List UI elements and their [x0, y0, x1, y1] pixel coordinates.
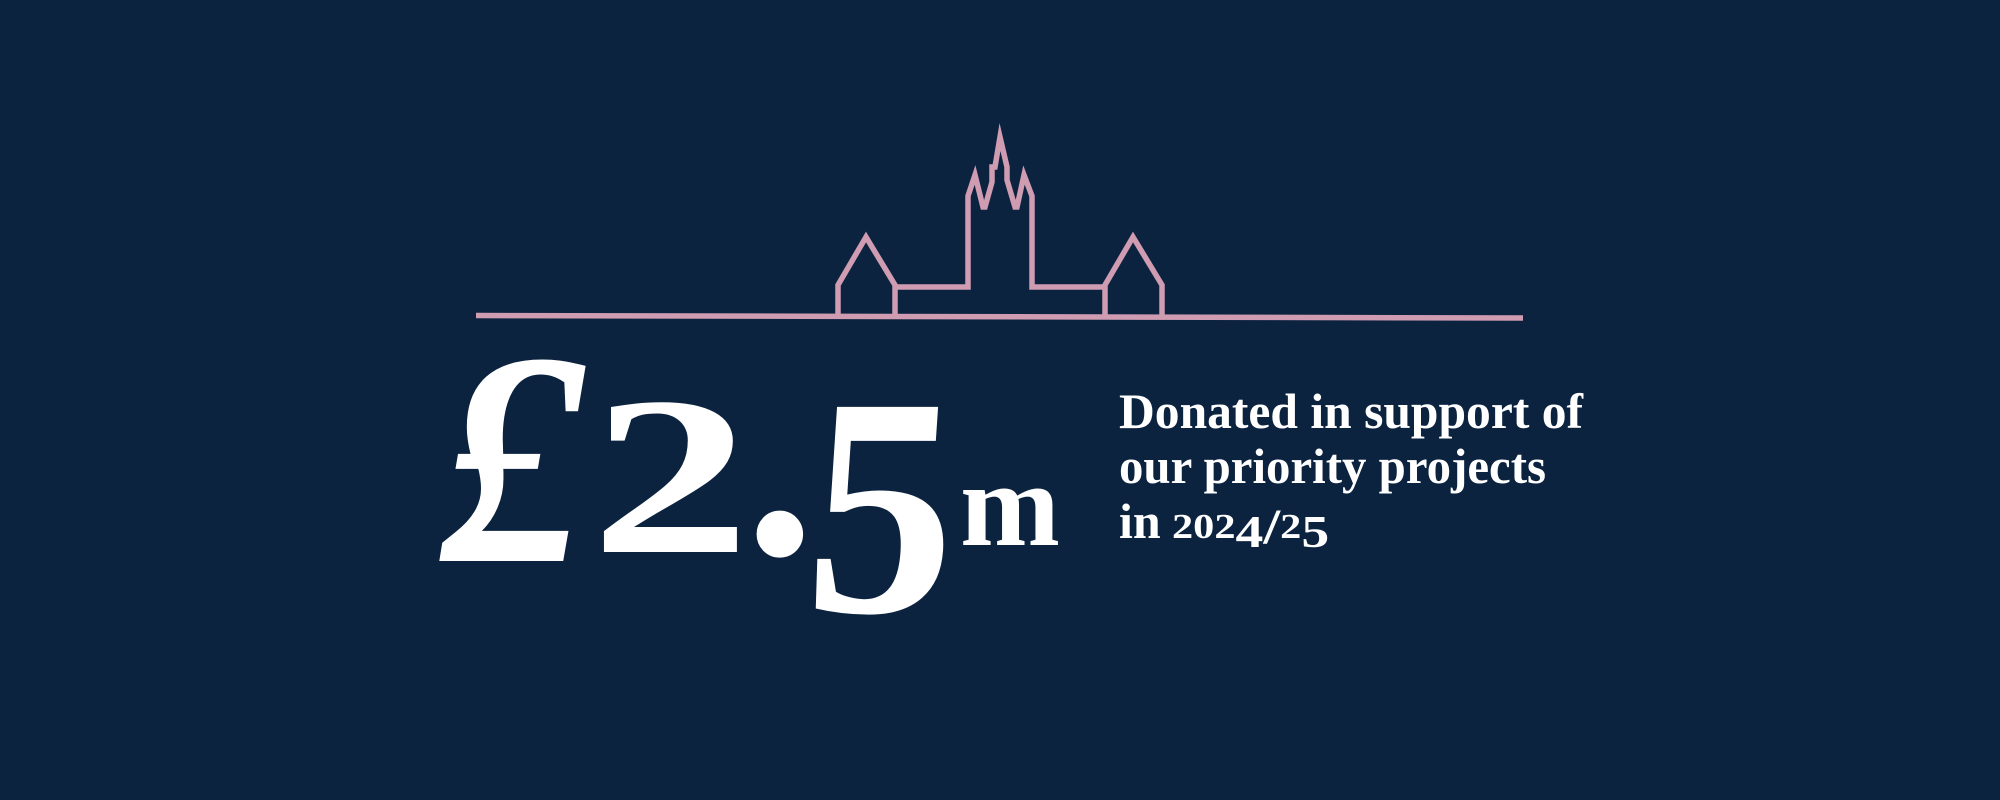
headline figure: £2.5m: 2	[590, 351, 751, 601]
text block: donation description: our priority projects	[1119, 438, 1546, 494]
text block: donation description: in	[1119, 493, 1161, 549]
headline figure: £2.5m	[435, 291, 1060, 679]
text block: donation description: 202	[1172, 507, 1235, 546]
text block: donation description: Donated in support of	[1119, 383, 1584, 439]
headline figure: £2.5m: 5	[798, 333, 968, 679]
headline figure: £2.5m: m	[960, 438, 1060, 571]
text block: donation description: 4	[1235, 507, 1263, 558]
headline figure: £2.5m: £	[435, 291, 590, 627]
text block: donation description: 5	[1301, 507, 1329, 558]
text block: donation description: 2	[1280, 507, 1301, 546]
text block: donation description: /	[1262, 500, 1281, 555]
text block: donation description	[1119, 383, 1584, 558]
icon: skyline of building with spires on a ground line	[476, 137, 1523, 318]
headline figure: £2.5m: .	[744, 296, 816, 617]
